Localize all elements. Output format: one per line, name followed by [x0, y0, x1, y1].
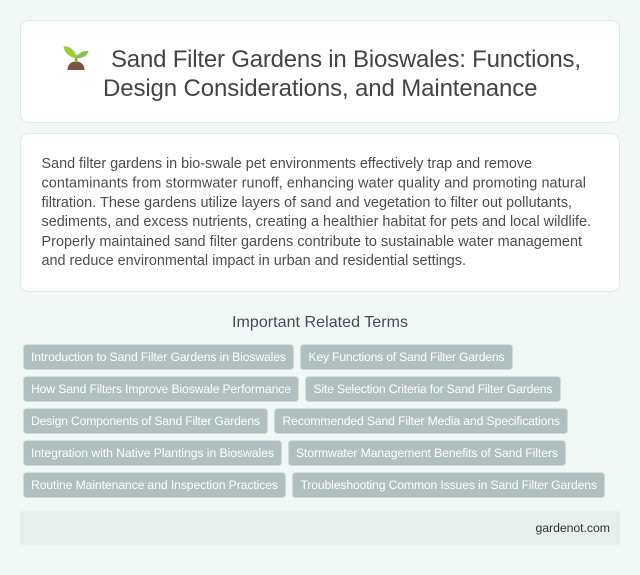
chip: stormwater benefits [288, 440, 566, 466]
icon: seedling [64, 46, 88, 70]
text block: description: Properly maintained sand filter gardens contribute to sustainable water management [42, 234, 582, 250]
chip: introduction: Introduction to Sand Filter Gardens in Bioswales [31, 350, 286, 364]
title [103, 46, 581, 102]
text block: description: contaminants from stormwater runoff, enhancing water quality and promoting natural [42, 175, 586, 191]
chip: introduction [24, 344, 294, 370]
chip: routine maintenance: Routine Maintenance and Inspection Practices [31, 478, 278, 492]
chip: recommended media: Recommended Sand Filter Media and Specifications [282, 414, 560, 428]
footer [20, 511, 620, 545]
text block: description: sediments, and excess nutrients, creating a healthier habitat for pets and local wildlife. [42, 214, 591, 230]
chip: troubleshooting: Troubleshooting Common Issues in Sand Filter Gardens [300, 478, 597, 492]
chip: design components: Design Components of Sand Filter Gardens [31, 414, 260, 428]
heading: related terms: Important Related Terms [232, 314, 408, 331]
footer: source: gardenot.com [536, 521, 610, 535]
chip: troubleshooting [292, 472, 604, 498]
chip: native plantings [24, 440, 282, 466]
panel: description [20, 134, 620, 292]
chip: stormwater benefits: Stormwater Management Benefits of Sand Filters [296, 446, 558, 460]
chip: recommended media [274, 408, 568, 434]
chip: design components [24, 408, 268, 434]
text block: description: filtration. These gardens utilize layers of sand and vegetation to filter out pollutants, [42, 195, 572, 211]
text block: description: and reduce environmental impact in urban and residential settings. [42, 253, 466, 269]
chip: performance: How Sand Filters Improve Bioswale Performance [31, 382, 291, 396]
chip: site selection [306, 376, 560, 402]
chip: key functions [300, 344, 512, 370]
title: Sand Filter Gardens in Bioswales: Functions, [111, 46, 581, 73]
chip: native plantings: Integration with Native Plantings in Bioswales [31, 446, 274, 460]
chip: routine maintenance [24, 472, 286, 498]
chip: performance [24, 376, 298, 402]
chip: site selection: Site Selection Criteria for Sand Filter Gardens [314, 382, 552, 396]
text block: description [42, 156, 591, 269]
panel: related terms chips [24, 344, 604, 498]
chip: key functions: Key Functions of Sand Filter Gardens [308, 350, 504, 364]
text block: description: Sand filter gardens in bio-swale pet environments effectively trap and remove [42, 156, 532, 172]
title: Design Considerations, and Maintenance [103, 75, 538, 102]
panel: title card [20, 20, 620, 122]
